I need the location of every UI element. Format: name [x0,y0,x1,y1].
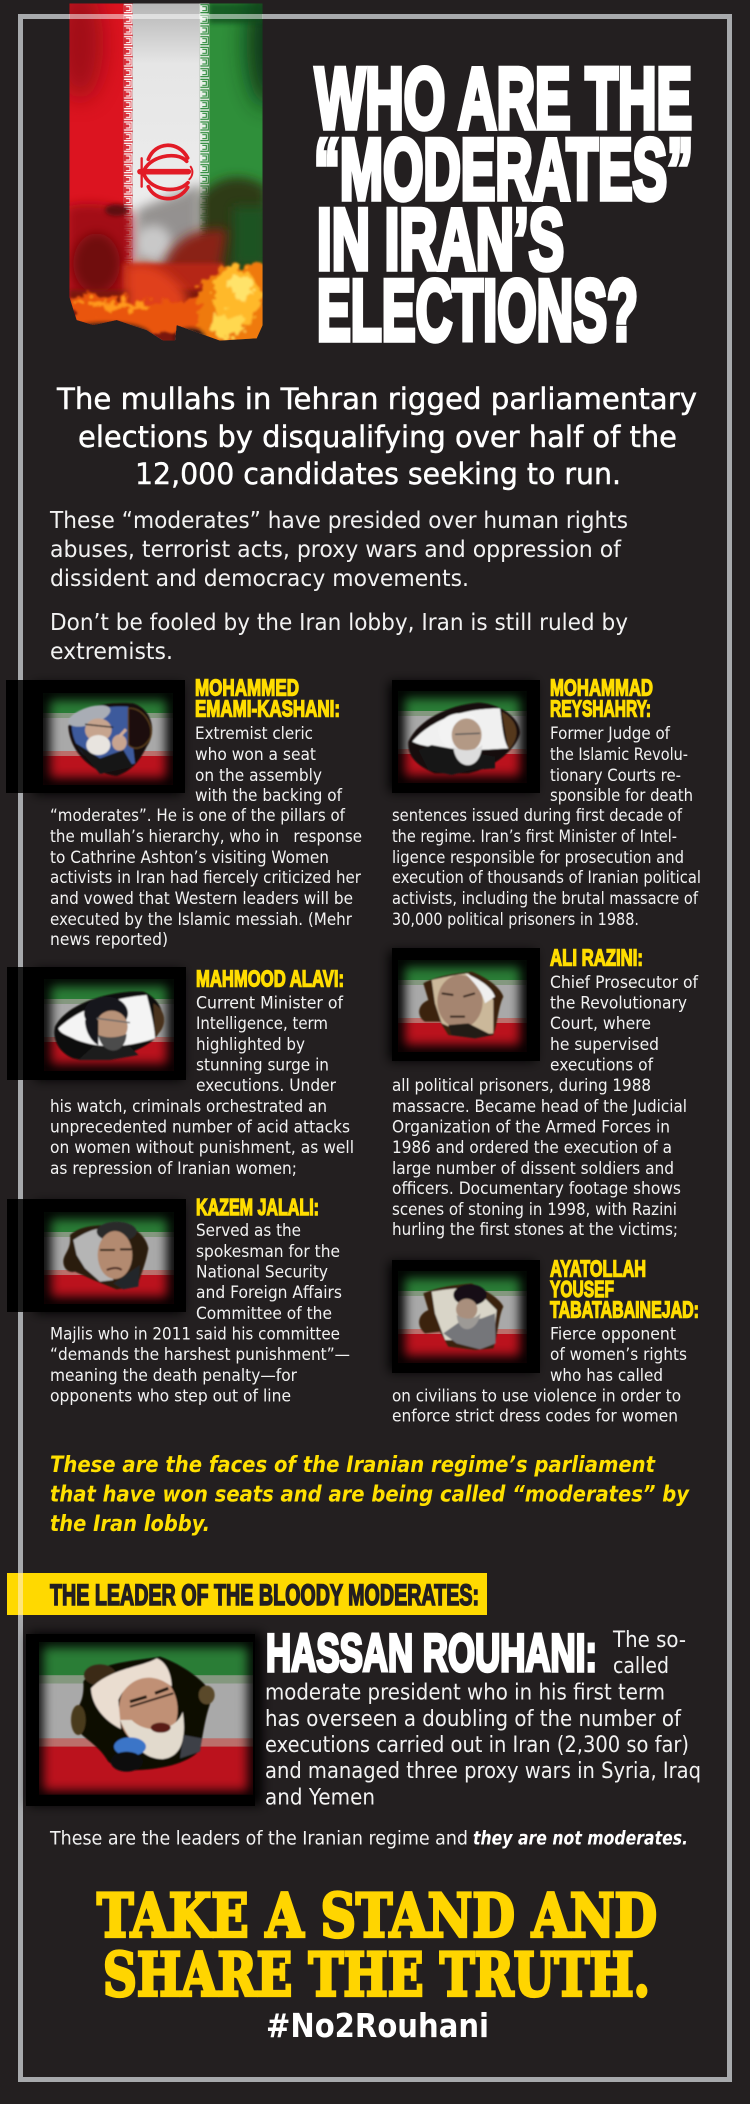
portrait: Emami-Kashani [6,680,185,793]
bio: and Foreign Affairs [196,1283,342,1302]
bio: with the backing of [195,786,343,805]
bio: opponents who step out of line [50,1387,291,1406]
portrait: Reyshahry [392,680,540,793]
burnt lower edge [82,320,153,334]
name [550,1256,699,1322]
bio: called [613,1654,669,1679]
bio: news reported) [50,930,168,949]
bio: 30,000 political prisoners in 1988. [392,910,639,929]
bio: Organization of the Armed Forces in [392,1118,670,1137]
intro paragraph [49,508,628,665]
intro heading: elections by disqualifying over half of the [78,420,677,454]
title [314,51,693,359]
bio [50,724,362,949]
panel: Mohammad Reyshahry [392,674,701,929]
name: EMAMI-KASHANI: [195,696,340,722]
banner: leader of the bloody moderates [7,1573,487,1615]
banner: leader of the bloody moderates: THE LEADER OF THE BLOODY MODERATES: [50,1579,479,1612]
panel: Hassan Rouhani [26,1624,701,1810]
bio: massacre. Became head of the Judicial [392,1097,687,1116]
bio: on civilians to use violence in order to [392,1387,681,1406]
bio: Chief Prosecutor of [550,973,699,992]
bio: moderate president who in his first term [265,1680,665,1706]
bio: he supervised [550,1035,659,1054]
bio: Current Minister of [196,994,344,1012]
bio [392,1325,687,1426]
bio: tionary Courts re- [550,766,681,785]
bio: enforce strict dress codes for women [392,1407,678,1426]
bio: executions of [550,1056,654,1074]
bio: meaning the death penalty—for [50,1366,297,1385]
smoke layers [199,177,267,273]
bio: Committee of the [196,1304,332,1323]
yellow statement: the Iran lobby. [50,1511,210,1537]
intro paragraph: dissident and democracy movements. [50,566,469,592]
bio: and Yemen [265,1786,375,1810]
bio: executions carried out in Iran (2,300 so far) [265,1733,689,1758]
intro heading: The mullahs in Tehran rigged parliamentary [56,382,697,416]
bio [265,1628,701,1810]
bio: the Islamic Revolu- [550,745,688,764]
bio: the regime. Iran’s first Minister of Intel- [392,827,677,846]
bio: The so- [612,1628,686,1653]
intro heading [56,382,697,491]
icon: burning Iranian flag [69,4,263,341]
bio: stunning surge in [196,1056,329,1074]
bio [50,994,354,1178]
closing statement: These are the leaders of the Iranian regime and [49,1828,468,1850]
bio: executed by the Islamic messiah. (Mehr [50,910,352,929]
bio: to Cathrine Ashton’s visiting Women [50,848,329,867]
bio: as repression of Iranian women; [50,1159,297,1178]
bio [392,724,701,929]
bio: highlighted by [196,1035,305,1054]
icon: flag emblem [140,145,192,199]
frame passing over flag [69,14,263,19]
name [195,674,340,722]
bio: large number of dissent soldiers and [392,1159,674,1178]
bio: officers. Documentary footage shows [392,1179,681,1198]
bio: Fierce opponent [550,1325,676,1344]
name: ALI RAZINI: [550,944,643,970]
name: KAZEM JALALI: [196,1194,319,1220]
name: MOHAMMAD [550,674,653,700]
bio: who has called [550,1366,663,1385]
name: REYSHAHRY: [550,696,651,722]
portrait: Tabatabainejad [392,1260,540,1373]
bio: “demands the harshest punishment”— [50,1345,350,1364]
intro paragraph: extremists. [50,639,173,665]
panel: Ayatollah Yousef Tabatabainejad [392,1256,699,1426]
bio: Served as the [196,1221,301,1240]
bio: has overseen a doubling of the number of [265,1707,682,1732]
intro paragraph: Don’t be fooled by the Iran lobby, Iran is still ruled by [50,610,628,636]
bio: Intelligence, term [196,1014,328,1033]
name: AYATOLLAH [550,1256,646,1282]
bio: Extremist cleric [195,724,313,743]
bio [50,1221,350,1406]
closing statement: they are not moderates. [473,1828,688,1850]
bio: the mullah’s hierarchy, who in response [50,827,362,846]
bio: 1986 and ordered the execution of a [392,1138,672,1157]
name [550,674,653,722]
panel: Mahmood Alavi [7,966,354,1178]
bio: who won a seat [195,745,316,764]
bio: ligence responsible for prosecution and [392,848,684,867]
bio: activists, including the brutal massacre of [392,889,699,908]
fire [70,263,267,343]
bio: on women without punishment, as well [50,1138,354,1157]
bio: hurling the first stones at the victims; [392,1220,678,1239]
name: MOHAMMED [195,674,299,700]
bio: and vowed that Western leaders will be [50,889,353,908]
bio: and managed three proxy wars in Syria, Iraq [265,1759,701,1784]
portrait: Rouhani [26,1634,255,1806]
bio: Court, where [550,1014,651,1033]
panel: Ali Razini [392,944,699,1239]
bio: execution of thousands of Iranian political [392,868,701,887]
bio: Majlis who in 2011 said his committee [50,1325,340,1344]
call to action [97,1882,657,2010]
bio: Former Judge of [550,724,671,743]
bio: the Revolutionary [550,994,687,1012]
portrait: Alavi [7,967,186,1080]
yellow statement [50,1452,690,1537]
bio [392,973,699,1239]
closing statement [49,1828,688,1850]
panel: Kazem Jalali [7,1194,350,1406]
bio: scenes of stoning in 1998, with Razini [392,1200,677,1219]
name: MAHMOOD ALAVI: [196,966,344,992]
bio: of women’s rights [550,1345,687,1364]
yellow statement: These are the faces of the Iranian regime’s parliament [50,1452,656,1478]
bio: unprecedented number of acid attacks [50,1118,350,1137]
bio: sentences issued during first decade of [392,806,683,825]
portrait: Jalali [7,1199,186,1312]
bio: spokesman for the [196,1242,340,1261]
intro heading: 12,000 candidates seeking to run. [135,457,621,491]
bio: sponsible for death [550,786,693,805]
hashtag: #No2Rouhani [266,2006,489,2045]
name: YOUSEF [550,1276,614,1302]
bio: all political prisoners, during 1988 [392,1076,651,1095]
bio: his watch, criminals orchestrated an [50,1097,327,1116]
panel: Mohammed Emami-Kashani [6,674,362,949]
bio: “moderates”. He is one of the pillars of [50,806,346,825]
intro paragraph: These “moderates” have presided over human rights [49,508,628,534]
bio: National Security [196,1262,328,1282]
bio: executions. Under [196,1076,336,1095]
bio: on the assembly [195,766,322,785]
title: IN IRAN’S [317,192,564,288]
bio: activists in Iran had fiercely criticized her [50,868,361,887]
intro paragraph: abuses, terrorist acts, proxy wars and oppression of [50,537,622,563]
portrait: Razini [392,948,540,1061]
